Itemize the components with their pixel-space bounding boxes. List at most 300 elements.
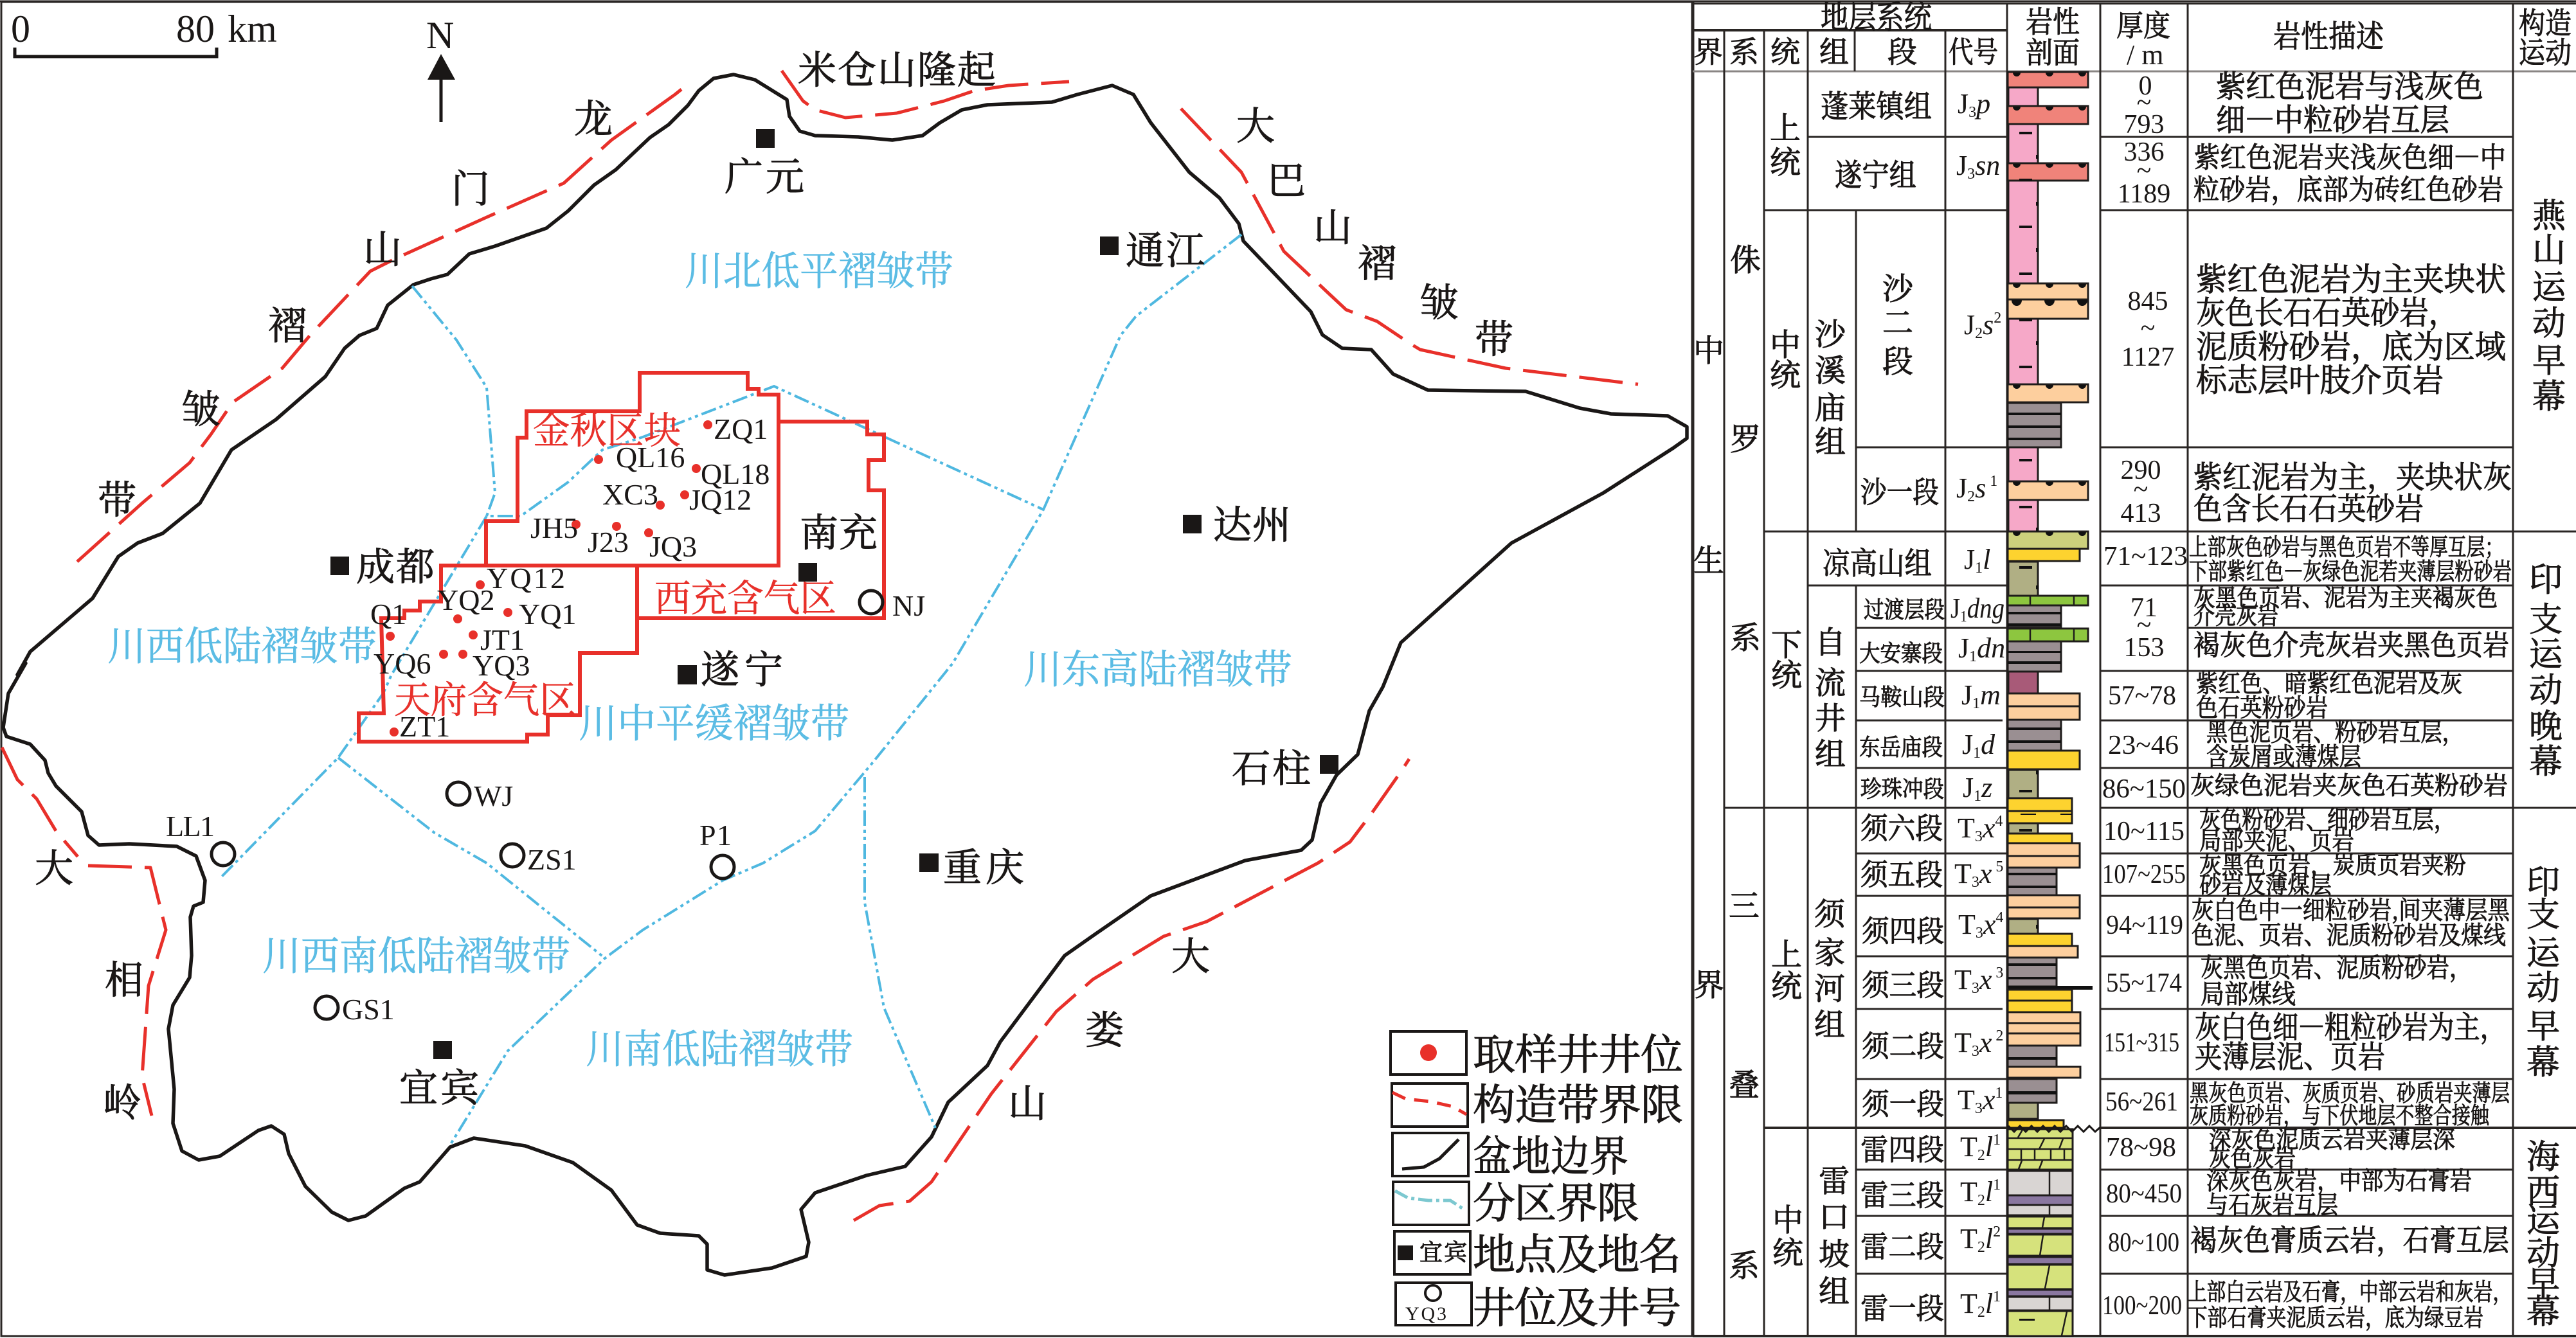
strata codes: x: [1979, 1027, 1992, 1058]
strata codes: 2: [1977, 1304, 1985, 1321]
formation and member names: 庙: [1815, 383, 1846, 427]
legend: well: 井位及井号: [1473, 1274, 1681, 1335]
table header: 岩性描述: [2273, 12, 2384, 56]
strata codes: 2: [1977, 1192, 1985, 1209]
fold zone labels: 川北低平褶皱带: [685, 239, 953, 296]
tectonic movement column: 燕: [2532, 189, 2566, 237]
strata codes: T: [1954, 1027, 1972, 1058]
strata codes: T: [1958, 812, 1975, 844]
lithology descriptions: 灰色粉砂岩、细砂岩互层，: [2199, 800, 2455, 836]
strata codes: 1: [1993, 1132, 2001, 1148]
strata codes: T: [1960, 1131, 1977, 1163]
city markers: 石柱: [1232, 738, 1311, 794]
erathem, system and series columns: 统: [1771, 650, 1802, 695]
erathem, system and series columns: 罗: [1730, 415, 1761, 459]
formation and member names: 须五段: [1860, 852, 1943, 894]
table header: 统: [1770, 29, 1800, 71]
sampled well names: YQ3: [473, 649, 530, 682]
erathem, system and series columns: 三: [1729, 881, 1760, 925]
table header: 剖面: [2026, 30, 2080, 72]
strata codes: 2: [1967, 488, 1975, 505]
strata codes: 3: [1976, 925, 1983, 941]
strata codes: l: [1985, 1223, 1993, 1254]
lithology descriptions: 局部煤线: [2201, 973, 2296, 1011]
lithology descriptions: 灰色灰岩: [2209, 1139, 2296, 1173]
lithology descriptions: 灰白色细—粗粒砂岩为主，: [2195, 1003, 2506, 1047]
strata codes: 1: [1960, 609, 1967, 625]
legend: basin boundary: [1392, 1122, 1628, 1183]
lithology descriptions: 灰黑色页岩、泥质粉砂岩，: [2201, 947, 2472, 985]
lithology descriptions: 黑色泥页岩、粉砂岩互层，: [2206, 713, 2463, 749]
lithology descriptions: 色石英粉砂岩: [2196, 688, 2328, 724]
strata codes: l: [1985, 1131, 1993, 1163]
strata codes: 1: [1993, 1177, 2001, 1193]
formation and member names: 坡: [1819, 1229, 1850, 1274]
fold zone labels: [107, 239, 1292, 1075]
formation and member names: 段: [1882, 337, 1913, 381]
sampled well names: YQ6: [374, 647, 431, 680]
formation and member names: 遂宁组: [1835, 150, 1916, 195]
strata codes: 1: [1986, 473, 1997, 490]
strata codes: 3: [1972, 1043, 1979, 1060]
strata codes: 5: [1992, 859, 2003, 875]
formation and member names: 二: [1882, 298, 1913, 343]
thickness column: 1127: [2121, 343, 2174, 372]
sampled well names: [370, 413, 770, 743]
table header: 厚度: [2116, 3, 2170, 45]
erathem, system and series columns: 叠: [1729, 1060, 1760, 1105]
legend: zone boundary: [1393, 1169, 1639, 1230]
strata codes: T: [1958, 909, 1976, 940]
erathem, system and series columns: 中: [1770, 320, 1801, 364]
mountain belt labels: 山: [1313, 197, 1352, 253]
sampled well names: YQ12: [487, 562, 565, 594]
formation and member names: 雷四段: [1860, 1127, 1944, 1169]
thickness column: 71: [2130, 593, 2157, 623]
thickness column: 153: [2124, 633, 2164, 663]
mountain belt labels: 皱: [1420, 272, 1459, 328]
lithology descriptions: 深灰色泥质云岩夹薄层深: [2209, 1120, 2455, 1155]
table header: 系: [1729, 29, 1759, 71]
thickness column: 100~200: [2102, 1291, 2182, 1321]
strata codes: 4: [1995, 909, 2003, 926]
formation and member names: 口: [1819, 1192, 1850, 1236]
strata codes: T: [1954, 964, 1972, 995]
strata codes: J: [1956, 150, 1967, 181]
sampled well names: QL16: [616, 441, 685, 474]
basin boundary: [3, 75, 1687, 1275]
formation and member names: 东岳庙段: [1859, 729, 1943, 762]
erathem, system and series columns: 侏: [1730, 235, 1761, 280]
strata codes: J: [1958, 632, 1969, 664]
strata codes: J: [1950, 593, 1961, 624]
tectonic movement column: 幕: [2526, 1285, 2560, 1333]
tectonic movement column: 幕: [2532, 370, 2566, 418]
other wells: WJ: [474, 780, 513, 812]
thickness column: 71~123: [2103, 542, 2188, 571]
city markers: 遂宁: [701, 639, 783, 695]
strata codes: 2: [1994, 310, 2001, 326]
table header: 界: [1693, 29, 1723, 71]
lithology descriptions: 泥质粉砂岩，底为区域: [2196, 321, 2506, 368]
lithology descriptions: 灰色长石石英砂岩，: [2196, 287, 2458, 334]
lithology descriptions: 紫红泥岩为主，夹块状灰: [2193, 452, 2512, 497]
formation and member names: 井: [1815, 693, 1846, 738]
lithology descriptions: 标志层叶肢介页岩: [2196, 355, 2444, 401]
thickness column: 793: [2124, 110, 2164, 139]
sampled well names: JQ3: [649, 530, 697, 563]
formation and member names: 沙一段: [1860, 469, 1939, 512]
city markers: 广元: [725, 147, 804, 202]
unconformity line: [2008, 1126, 2100, 1132]
formation and member names: 组: [1815, 417, 1846, 461]
lithology descriptions: 紫红色、暗紫红色泥岩及灰: [2196, 664, 2462, 700]
tectonic movement column: 运: [2532, 260, 2566, 308]
lithology descriptions: 砂岩及薄煤层: [2199, 866, 2332, 900]
erathem, system and series columns: 统: [1770, 138, 1801, 182]
mountain belt labels: 相: [105, 950, 143, 1005]
formation and member names: 流: [1815, 658, 1846, 702]
strata codes: dng: [1967, 593, 2004, 624]
tectonic movement column: 幕: [2526, 1035, 2560, 1084]
tectonic movement column: 印: [2526, 855, 2560, 904]
legend: place: 宜宾: [1419, 1235, 1467, 1267]
scale bar: km: [228, 8, 277, 50]
formation and member names: 沙: [1882, 264, 1914, 308]
tectonic movement column: 支: [2526, 888, 2560, 936]
other wells: ZS1: [527, 843, 577, 876]
strata codes: 1: [1969, 648, 1977, 665]
tectonic movement column: 动: [2526, 1226, 2560, 1274]
gas block labels: 金秋区块: [533, 400, 681, 454]
erathem, system and series columns: 中: [1772, 1195, 1803, 1240]
city markers: 达州: [1213, 495, 1291, 550]
lithology descriptions: 与石灰岩互层: [2206, 1186, 2338, 1222]
fold zone labels: 川西低陆褶皱带: [107, 614, 377, 672]
city markers: 南充: [800, 503, 878, 558]
strata codes: J: [1964, 544, 1975, 575]
sampled well names: YQ2: [437, 584, 494, 616]
sampled well names: JT1: [480, 623, 525, 656]
other wells: [166, 589, 925, 1026]
formation and member names: 雷: [1819, 1156, 1850, 1200]
thickness column: 86~150: [2102, 774, 2186, 804]
erathem, system and series columns: 系: [1729, 1241, 1760, 1285]
strata codes: x: [1979, 964, 1992, 995]
formation and member names: 沙: [1815, 310, 1847, 354]
gas block outlines: [359, 373, 884, 742]
lithology descriptions: 紫红色泥岩为主夹块状: [2196, 254, 2506, 300]
lithology descriptions: 下部石膏夹泥质云岩，底为绿豆岩: [2188, 1298, 2483, 1333]
strata codes: 1: [1973, 745, 1981, 762]
thickness column: 80~450: [2106, 1179, 2182, 1209]
formation and member names: 自: [1815, 618, 1846, 662]
erathem, system and series columns: 生: [1693, 536, 1724, 580]
strata codes: 2: [1992, 1028, 2003, 1044]
formation and member names: 河: [1814, 964, 1845, 1008]
formation and member names: 溪: [1815, 346, 1846, 390]
formation and member names: 家: [1814, 928, 1845, 972]
strata codes: 2: [1977, 1239, 1985, 1256]
lithology descriptions: 紫红色泥岩与浅灰色: [2216, 62, 2483, 106]
formation and member names: 蓬莱镇组: [1821, 82, 1932, 126]
formation and member names: 雷三段: [1860, 1172, 1944, 1215]
fold zone labels: 川南低陆褶皱带: [586, 1017, 853, 1075]
strata codes: 1: [1972, 695, 1980, 712]
formation and member names: 须三段: [1862, 962, 1944, 1004]
thickness column: 23~46: [2108, 731, 2179, 760]
lithology descriptions: 介壳灰岩: [2193, 596, 2278, 631]
erathem, system and series columns: 系: [1730, 613, 1761, 657]
tectonic movement column: 海: [2526, 1130, 2560, 1178]
thickness column: 107~255: [2102, 860, 2186, 889]
strata codes: x: [1982, 1084, 1995, 1116]
thickness column: 80~100: [2108, 1228, 2179, 1258]
formation and member names: 雷一段: [1860, 1285, 1944, 1328]
strata codes: p: [1974, 88, 1990, 120]
strata codes: sn: [1975, 150, 2000, 181]
strata codes: J: [1964, 309, 1975, 341]
thickness column: 151~315: [2104, 1028, 2179, 1058]
city markers: [330, 129, 1338, 1113]
tectonic movement column: 早: [2526, 999, 2560, 1048]
table header: 段: [1887, 29, 1917, 71]
strata codes: T: [1960, 1176, 1977, 1208]
strata codes: 3: [1992, 965, 2003, 981]
sampled well names: J23: [588, 526, 629, 558]
formation and member names: 须四段: [1862, 908, 1944, 950]
tectonic movement column: 山: [2532, 223, 2566, 271]
strata codes: T: [1954, 858, 1972, 889]
mountain belt labels: 皱: [182, 379, 221, 434]
thickness column: ~: [2137, 156, 2151, 186]
mountain belt labels: 带: [1475, 309, 1513, 364]
thickness column: ~: [2134, 475, 2148, 504]
mountain belt labels: 大: [1171, 926, 1210, 981]
lithology descriptions: [2188, 62, 2512, 1333]
strata codes: 1: [1995, 1085, 2003, 1102]
mountain belt labels: 岭: [103, 1073, 141, 1128]
tectonic movement column: 动: [2529, 663, 2562, 711]
erathem, system and series columns: 中: [1693, 326, 1724, 370]
strata codes: J: [1961, 679, 1972, 711]
tectonic movement column: 运: [2529, 627, 2563, 675]
strata codes: 1: [1974, 788, 1981, 805]
mountain belt labels: 大: [1236, 96, 1275, 151]
strata codes: l: [1985, 1176, 1993, 1208]
formation and member names: [1814, 82, 1945, 1328]
strata codes: 3: [1975, 828, 1983, 845]
tectonic movement column: [2526, 189, 2566, 1333]
table header: 组: [1819, 29, 1849, 71]
lithology descriptions: 灰质粉砂岩，与下伏地层不整合接触: [2190, 1098, 2490, 1130]
mountain belt labels: 门: [451, 159, 490, 214]
erathem, system and series columns: 上: [1770, 103, 1801, 148]
lithology descriptions: 深灰色灰岩，中部为石膏岩: [2206, 1161, 2472, 1197]
city markers: 宜宾: [399, 1058, 479, 1113]
gas block labels: 天府含气区: [394, 670, 576, 724]
tectonic movement column: 晚: [2529, 699, 2562, 747]
strata codes: d: [1981, 729, 1995, 760]
scale bar: 80: [176, 8, 215, 50]
erathem, system and series columns: 下: [1771, 620, 1802, 665]
mountain belt labels: 龙: [574, 89, 613, 144]
tectonic movement column: 运: [2526, 926, 2561, 974]
lithology descriptions: 黑灰色页岩、灰质页岩、砂质岩夹薄层: [2190, 1075, 2510, 1108]
strata codes: [1950, 88, 2005, 1321]
thickness column: 290: [2120, 456, 2161, 485]
strata codes: 3: [1967, 166, 1975, 183]
thickness column: [2102, 71, 2188, 1321]
mountain belt labels: 大: [35, 838, 73, 893]
strata codes: 2: [1993, 1224, 2001, 1240]
lithology descriptions: 细—中粒砂岩互层: [2216, 95, 2449, 139]
table header: 代号: [1949, 29, 1998, 71]
other wells: GS1: [342, 993, 395, 1026]
north arrow: [426, 14, 455, 122]
strata codes: J: [1962, 729, 1973, 760]
sampled well names: JQ12: [689, 483, 752, 516]
mountain belt labels: 带: [98, 470, 136, 525]
legend: sampled well: 取样井井位: [1473, 1021, 1683, 1082]
sampled well names: ZT1: [399, 710, 450, 743]
sampled well names: JH5: [530, 512, 578, 544]
mountain belt labels: 巴: [1267, 150, 1306, 206]
mountain belt labels: [35, 40, 1513, 1128]
sampled well names: Q1: [370, 598, 406, 630]
lithology descriptions: 灰绿色泥岩夹灰色石英粉砂岩: [2190, 766, 2508, 802]
erathem, system and series columns: 统: [1771, 961, 1802, 1006]
thickness column: 413: [2120, 499, 2161, 528]
erathem, system and series columns: 界: [1693, 960, 1724, 1004]
city markers: 通江: [1126, 220, 1205, 276]
thickness column: 10~115: [2103, 817, 2184, 846]
strata codes: s: [1983, 309, 1994, 341]
legend: well: YQ3: [1405, 1303, 1446, 1325]
strata codes: 2: [1975, 325, 1983, 342]
thickness column: 1189: [2118, 179, 2170, 209]
mountain belt labels: 褶: [268, 296, 307, 351]
gas block labels: 西充含气区: [654, 568, 836, 622]
strata codes: J: [1956, 472, 1967, 504]
formation and member names: 组: [1814, 1000, 1845, 1044]
formation and member names: 过渡层段: [1864, 592, 1945, 625]
fold zone labels: 川中平缓褶皱带: [579, 691, 849, 749]
sampled wells: [386, 420, 712, 736]
formation and member names: 组: [1819, 1267, 1850, 1311]
legend: zone boundary: 分区界限: [1473, 1169, 1639, 1230]
lithology descriptions: 局部夹泥、页岩: [2199, 821, 2354, 857]
strata codes: 3: [1968, 104, 1976, 121]
formation and member names: 须六段: [1860, 805, 1943, 848]
thickness column: 78~98: [2106, 1133, 2176, 1163]
thickness column: 57~78: [2108, 681, 2176, 711]
lithology descriptions: 色含长石石英砂岩: [2193, 484, 2424, 528]
formation and member names: 须: [1814, 889, 1846, 934]
strata codes: J: [1958, 88, 1968, 120]
gas block labels: [394, 400, 836, 724]
strata codes: x: [1979, 858, 1992, 889]
lithology descriptions: 灰黑色页岩、泥岩为主夹褐灰色: [2193, 578, 2498, 613]
lithology descriptions: 灰黑色页岩，炭质页岩夹粉: [2199, 846, 2466, 880]
thickness column: ~: [2137, 88, 2151, 118]
formation and member names: 须二段: [1862, 1023, 1944, 1066]
formation and member names: 珍珠冲段: [1860, 771, 1944, 804]
thickness column: 336: [2124, 138, 2164, 167]
formation and member names: 须一段: [1862, 1081, 1944, 1123]
formation and member names: 马鞍山段: [1859, 679, 1945, 712]
lithology descriptions: 粒砂岩，底部为砖红色砂岩: [2193, 166, 2503, 208]
strata codes: 4: [1995, 813, 2003, 830]
strata codes: T: [1958, 1084, 1975, 1116]
city markers: 重庆: [943, 837, 1024, 893]
formation and member names: 组: [1815, 729, 1846, 774]
legend: basin boundary: 盆地边界: [1473, 1122, 1628, 1183]
erathem, system and series columns: 统: [1772, 1228, 1803, 1272]
sampled well names: ZQ1: [714, 413, 768, 445]
sampled well names: XC3: [602, 478, 658, 511]
city markers: 成都: [356, 537, 435, 592]
tectonic belt boundaries: [2, 71, 1638, 1220]
erathem, system and series columns: 上: [1771, 930, 1802, 974]
strata codes: z: [1981, 772, 1992, 803]
legend: [1391, 1021, 1683, 1335]
zone boundaries: [220, 235, 1241, 1145]
sampled well names: QL18: [701, 458, 770, 490]
thickness column: ~: [2137, 611, 2151, 640]
strata codes: x: [1982, 812, 1995, 844]
legend: tectonic boundary: 构造带界限: [1473, 1071, 1683, 1132]
erathem, system and series columns: [1693, 103, 1803, 1285]
fold zone labels: 川东高陆褶皱带: [1023, 638, 1292, 695]
mountain belt labels: 米仓山隆起: [798, 40, 996, 95]
table header: [1693, 0, 2571, 72]
strata codes: T: [1960, 1288, 1977, 1319]
thickness column: 845: [2128, 287, 2168, 316]
legend: place: 地点及地名: [1473, 1220, 1681, 1281]
tectonic movement column: 动: [2526, 961, 2560, 1009]
mountain belt labels: 娄: [1085, 1000, 1124, 1055]
tectonic movement column: 早: [2532, 334, 2566, 382]
panel: basin map: [1, 2, 1692, 1336]
thickness column: 0: [2138, 71, 2152, 101]
strata codes: T: [1960, 1223, 1977, 1254]
sampled well names: YQ1: [519, 598, 576, 630]
lithology descriptions: 夹薄层泥、页岩: [2195, 1032, 2385, 1076]
mountain belt labels: 褶: [1358, 233, 1396, 289]
thickness column: ~: [2141, 314, 2155, 343]
tectonic movement column: 西: [2526, 1164, 2560, 1213]
other wells: NJ: [892, 589, 925, 622]
lithology descriptions: 含炭屑或薄煤层: [2206, 737, 2361, 773]
scale bar: [11, 8, 277, 57]
scale bar: 0: [11, 8, 30, 50]
fold zone labels: 川西南低陆褶皱带: [262, 924, 570, 981]
strata codes: 3: [1975, 1100, 1983, 1117]
strata codes: l: [1985, 1288, 1993, 1319]
formation and member names: 凉高山组: [1823, 539, 1932, 583]
north arrow: N: [426, 14, 454, 57]
erathem, system and series columns: 统: [1770, 350, 1801, 395]
tectonic movement column: 支: [2529, 593, 2562, 641]
mountain belt labels: 山: [1008, 1073, 1047, 1128]
strata codes: 2: [1977, 1147, 1985, 1164]
strata codes: 3: [1972, 874, 1979, 891]
lithology descriptions: 紫红色泥岩夹浅灰色细—中: [2194, 134, 2506, 175]
lithology column: [2008, 72, 2100, 1336]
tectonic movement column: 幕: [2529, 735, 2562, 783]
tectonic movement column: 早: [2526, 1256, 2560, 1305]
